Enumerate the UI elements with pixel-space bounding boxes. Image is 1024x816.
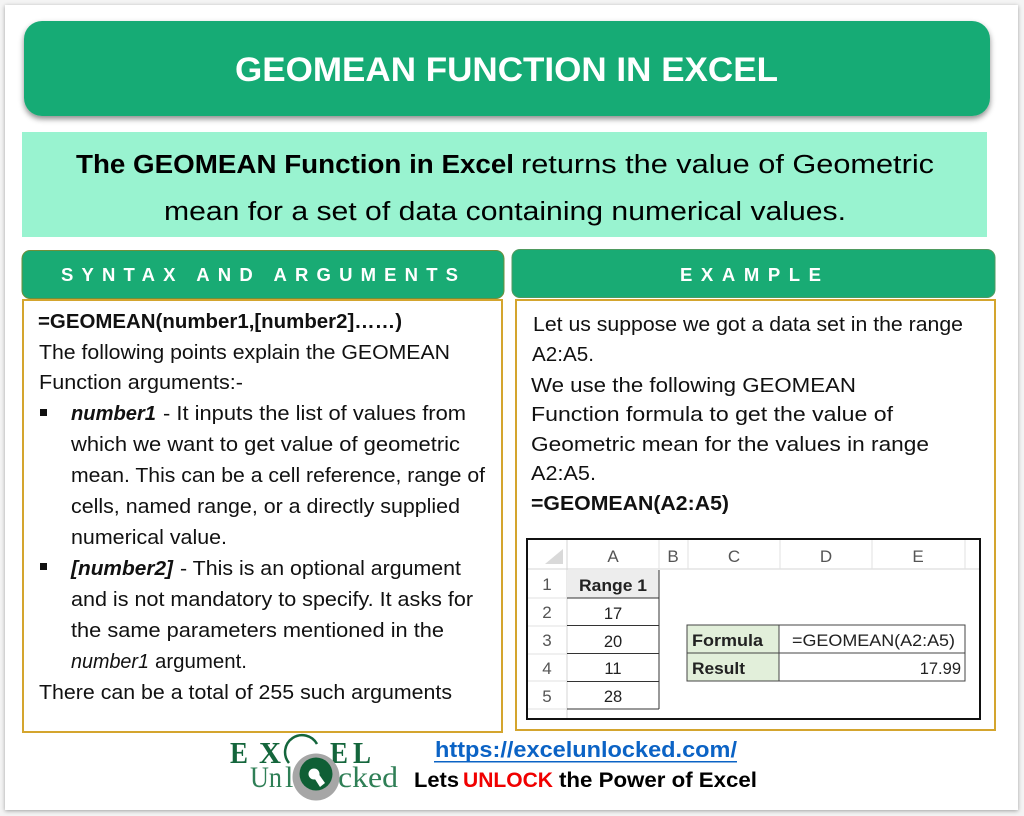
data table: range 1 (567, 570, 659, 709)
panel: syntax and arguments (23, 300, 502, 732)
logo: excel unlocked: l (285, 761, 293, 794)
bullet: number2: argument. (155, 650, 247, 673)
data table: range 1: 11 (604, 660, 622, 678)
sheet grid headers: 3 (542, 631, 552, 650)
bullet: number1: which we want to get value of geometric (70, 433, 460, 456)
example text (531, 313, 963, 515)
bullet: number1: mean. This can be a cell reference, range of (71, 464, 485, 487)
tagline: UNLOCK (463, 769, 553, 792)
data table: range 1: 28 (604, 688, 622, 706)
sheet grid headers: A (607, 547, 619, 566)
logo: excel unlocked: E (330, 735, 348, 770)
bullet: number2: [number2] (70, 557, 174, 580)
example text: A2:A5. (531, 462, 596, 485)
sheet grid headers: E (912, 547, 924, 566)
example text: Geometric mean for the values in range (531, 433, 929, 456)
bullet: number1: - It inputs the list of values from (163, 402, 466, 425)
result table: 17.99 (920, 660, 961, 678)
syntax formula: =GEOMEAN(number1,[number2]……) (38, 310, 402, 333)
data table: range 1: Range 1 (579, 577, 647, 595)
header: syntax and arguments (22, 250, 504, 298)
definition box: mean for a set of data containing numerical values. (164, 198, 846, 226)
result table: =GEOMEAN(A2:A5) (792, 632, 955, 650)
intro text (39, 341, 450, 394)
bullet: number2: number1 (71, 650, 149, 673)
definition box (22, 132, 987, 237)
example text: Let us suppose we got a data set in the range (533, 313, 963, 336)
logo: excel unlocked (230, 735, 398, 800)
sheet grid headers: 4 (542, 659, 552, 678)
sheet grid headers: C (728, 547, 740, 566)
bullet: number1: cells, named range, or a directly supplied (71, 495, 460, 518)
title banner (24, 21, 990, 116)
logo: excel unlocked: Un (250, 761, 282, 794)
logo: excel unlocked: L (353, 735, 371, 770)
logo: excel unlocked: cked (338, 761, 398, 794)
logo: excel unlocked: E (230, 735, 248, 770)
sheet grid headers: D (820, 547, 832, 566)
icon: padlock (292, 754, 340, 800)
sheet grid headers: 2 (542, 603, 552, 622)
tagline: the Power of Excel (559, 769, 757, 792)
result table: Formula (692, 632, 764, 650)
intro text: The following points explain the GEOMEAN (39, 341, 450, 364)
result table: Result (692, 660, 746, 678)
sheet grid headers: B (667, 547, 679, 566)
panel: example (516, 300, 995, 730)
bullet: number2 (40, 557, 473, 673)
sheet grid headers: 1 (542, 575, 552, 594)
example text: A2:A5. (532, 343, 594, 366)
bullet: number2: the same parameters mentioned in the (71, 619, 444, 642)
definition box: The GEOMEAN Function in Excel (76, 151, 514, 179)
example formula: =GEOMEAN(A2:A5) (531, 492, 729, 515)
header: syntax and arguments: SYNTAX AND ARGUMENTS (61, 264, 458, 285)
sheet grid headers (528, 540, 979, 718)
data table: range 1: 17 (604, 605, 622, 623)
bullet: number1 (40, 402, 485, 549)
header: example: EXAMPLE (680, 264, 821, 285)
result table (687, 625, 965, 681)
definition box: returns the value of Geometric (521, 151, 934, 179)
example text: Function formula to get the value of (531, 403, 893, 426)
header: example (512, 250, 995, 298)
intro text: Function arguments:- (39, 371, 243, 394)
sheet grid headers: 5 (542, 687, 552, 706)
title banner: GEOMEAN FUNCTION IN EXCEL (235, 51, 778, 89)
data table: range 1: 20 (604, 633, 622, 651)
website link: https://excelunlocked.com/ (435, 737, 737, 762)
closing note: There can be a total of 255 such arguments (39, 681, 452, 704)
logo: excel unlocked: X (259, 735, 282, 770)
excel screenshot (527, 539, 980, 719)
example text: We use the following GEOMEAN (531, 374, 856, 397)
bullet: number2: - This is an optional argument (180, 557, 461, 580)
tagline: Lets (414, 769, 459, 792)
bullet: number2: and is not mandatory to specify. It asks for (71, 588, 473, 611)
tagline (414, 769, 757, 792)
bullet: number1: number1 (71, 402, 156, 425)
bullet: number1: numerical value. (71, 526, 227, 549)
